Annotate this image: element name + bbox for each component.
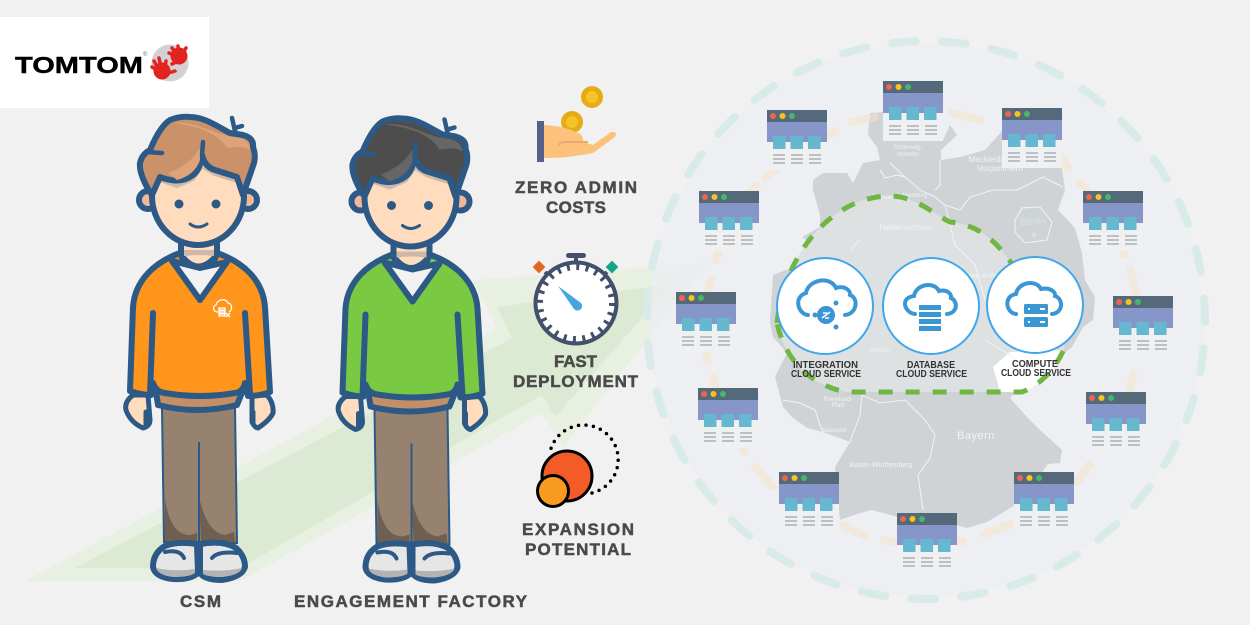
window 10: [779, 472, 839, 532]
service windows: [676, 81, 1173, 573]
ears: [352, 192, 370, 210]
legs: [162, 408, 237, 543]
state labels: ★: [1030, 230, 1038, 240]
legs: [374, 410, 450, 544]
window 2: [767, 110, 827, 170]
belt: [368, 386, 458, 412]
sweater: [342, 254, 482, 398]
icon: database cloud: [905, 285, 956, 331]
state labels: Mecklenburg-: [969, 155, 1018, 164]
shoes: [366, 543, 458, 580]
window 5: [1083, 191, 1143, 251]
neck: [181, 240, 217, 266]
orange dashed ring: [705, 113, 1137, 543]
state labels: Schleswig-: [893, 145, 923, 151]
shoes: [153, 543, 245, 580]
compute cloud service: [987, 257, 1083, 379]
state labels: DEUTSCHLAND: [908, 381, 994, 392]
logo: [0, 17, 209, 108]
label: expansion potential: POTENTIAL: [525, 540, 631, 559]
hands: [338, 396, 486, 430]
logo: ®: [143, 51, 148, 58]
map of Germany: [770, 112, 1095, 528]
state labels: Vorpommern: [977, 164, 1023, 173]
shirt: [172, 261, 227, 300]
label: fast deployment: DEPLOYMENT: [513, 372, 639, 391]
shirt: [384, 262, 440, 302]
integration cloud service: CLOUD SERVICE: [791, 369, 861, 380]
label: expansion potential: EXPANSION: [522, 520, 634, 539]
state borders: [783, 160, 1063, 510]
ears: [139, 191, 157, 209]
state labels: Hamburg: [903, 193, 927, 199]
big network circle: [647, 41, 1205, 599]
icon: integration cloud: [798, 280, 856, 330]
state labels: Niedersachsen: [879, 223, 933, 232]
window 7: [1113, 296, 1173, 356]
database cloud service: CLOUD SERVICE: [896, 369, 967, 380]
database cloud service: [883, 258, 979, 380]
hands: [126, 395, 273, 428]
window 3: [1002, 108, 1062, 168]
window 1: [883, 81, 943, 141]
window 4: [699, 191, 759, 251]
logo on sweater: [214, 300, 232, 317]
state labels: Sachsen-Anhalt: [952, 273, 1002, 280]
character: Engagement Factory: [338, 118, 486, 581]
label: fast deployment: FAST: [554, 352, 598, 371]
face: [152, 147, 244, 245]
neck: [394, 242, 430, 268]
icon: expansion circles: [538, 425, 618, 506]
label: fast deployment: [513, 352, 639, 391]
window 11: [1014, 472, 1074, 532]
icon: globe with hands: [152, 44, 188, 82]
integration cloud service: INTEGRATION: [793, 360, 858, 371]
state labels: Holstein: [897, 152, 919, 158]
integration cloud service: [777, 258, 873, 380]
icon: compute cloud: [1007, 283, 1061, 327]
sweater: [130, 253, 270, 396]
window 12: [897, 513, 957, 573]
white patch: [993, 350, 1063, 392]
hair: [352, 118, 467, 196]
face: [364, 148, 456, 246]
compute cloud service: COMPUTE: [1012, 359, 1058, 370]
belt: [155, 385, 245, 410]
window 8: [698, 388, 758, 448]
label: expansion potential: [522, 520, 634, 559]
character: CSM: [126, 117, 273, 580]
window 9: [1086, 392, 1146, 452]
label: Engagement Factory: ENGAGEMENT FACTORY: [294, 592, 528, 611]
state labels: Baden-Württemberg: [849, 462, 913, 469]
state labels: Hessen: [870, 348, 890, 354]
state labels: Bremen: [871, 195, 893, 201]
label: CSM: CSM: [180, 592, 221, 611]
state labels: Saarland: [822, 428, 846, 434]
state labels: Berlin: [1020, 217, 1046, 228]
window 6: [676, 292, 736, 352]
green dashed ring: [777, 196, 1065, 392]
icon: stopwatch: [533, 253, 618, 344]
label: zero admin costs: ZERO ADMIN: [515, 178, 637, 197]
state labels: Rheinland-: [823, 397, 853, 403]
inner region: [777, 196, 1065, 392]
growth arrow: [25, 263, 708, 581]
state labels: Bayern: [957, 430, 995, 442]
logo: TOMTOM: [15, 52, 143, 78]
state labels: Pfalz: [831, 403, 845, 409]
hair: [140, 117, 255, 195]
compute cloud service: CLOUD SERVICE: [1001, 368, 1071, 379]
label: zero admin costs: [515, 178, 637, 217]
icon: hand with coins: [537, 86, 616, 162]
state labels: [822, 145, 1046, 469]
label: zero admin costs: COSTS: [546, 198, 606, 217]
database cloud service: DATABASE: [907, 360, 955, 371]
